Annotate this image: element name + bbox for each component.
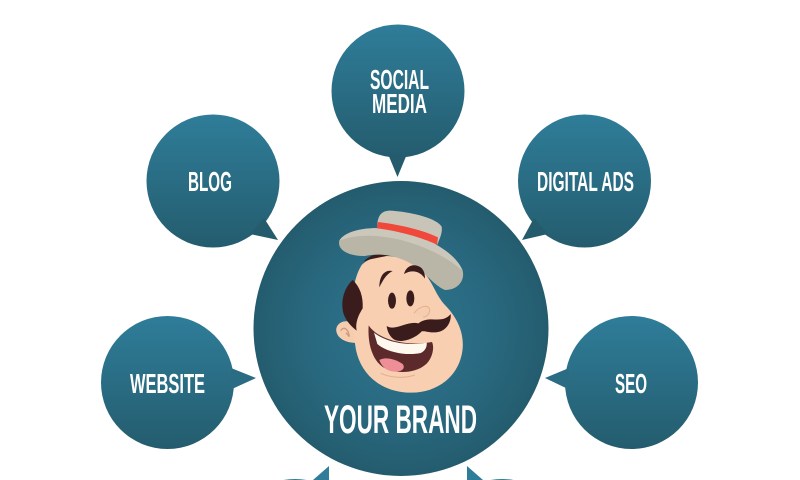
bubble: website [101, 316, 256, 449]
bubble: social media: MEDIA [372, 88, 427, 119]
bubble: seo: SEO [615, 368, 647, 399]
hair [342, 280, 363, 331]
bubble: digital ads [518, 114, 651, 248]
mascot face [336, 211, 463, 393]
hat [339, 211, 463, 290]
mouth [368, 325, 433, 372]
head [352, 256, 463, 393]
ear [336, 321, 358, 343]
center brand circle [254, 181, 548, 476]
eyebrows [379, 271, 393, 287]
bubble: blog [146, 114, 280, 248]
nose [414, 306, 430, 317]
bubble: bottom left, cropped [284, 466, 329, 480]
mustache [387, 314, 451, 341]
bubble: bottom right, cropped [467, 466, 514, 480]
bubble: social media: SOCIAL [370, 64, 429, 95]
bubble: social media [332, 24, 464, 177]
bubble: digital ads: DIGITAL ADS [537, 166, 634, 197]
eyes [388, 293, 396, 309]
label: your brand: YOUR BRAND [324, 398, 477, 442]
bubble: website: WEBSITE [130, 368, 205, 399]
chin line [381, 373, 415, 377]
hat band [377, 222, 438, 245]
bubble: seo [545, 316, 698, 449]
bubble: blog: BLOG [188, 166, 232, 197]
